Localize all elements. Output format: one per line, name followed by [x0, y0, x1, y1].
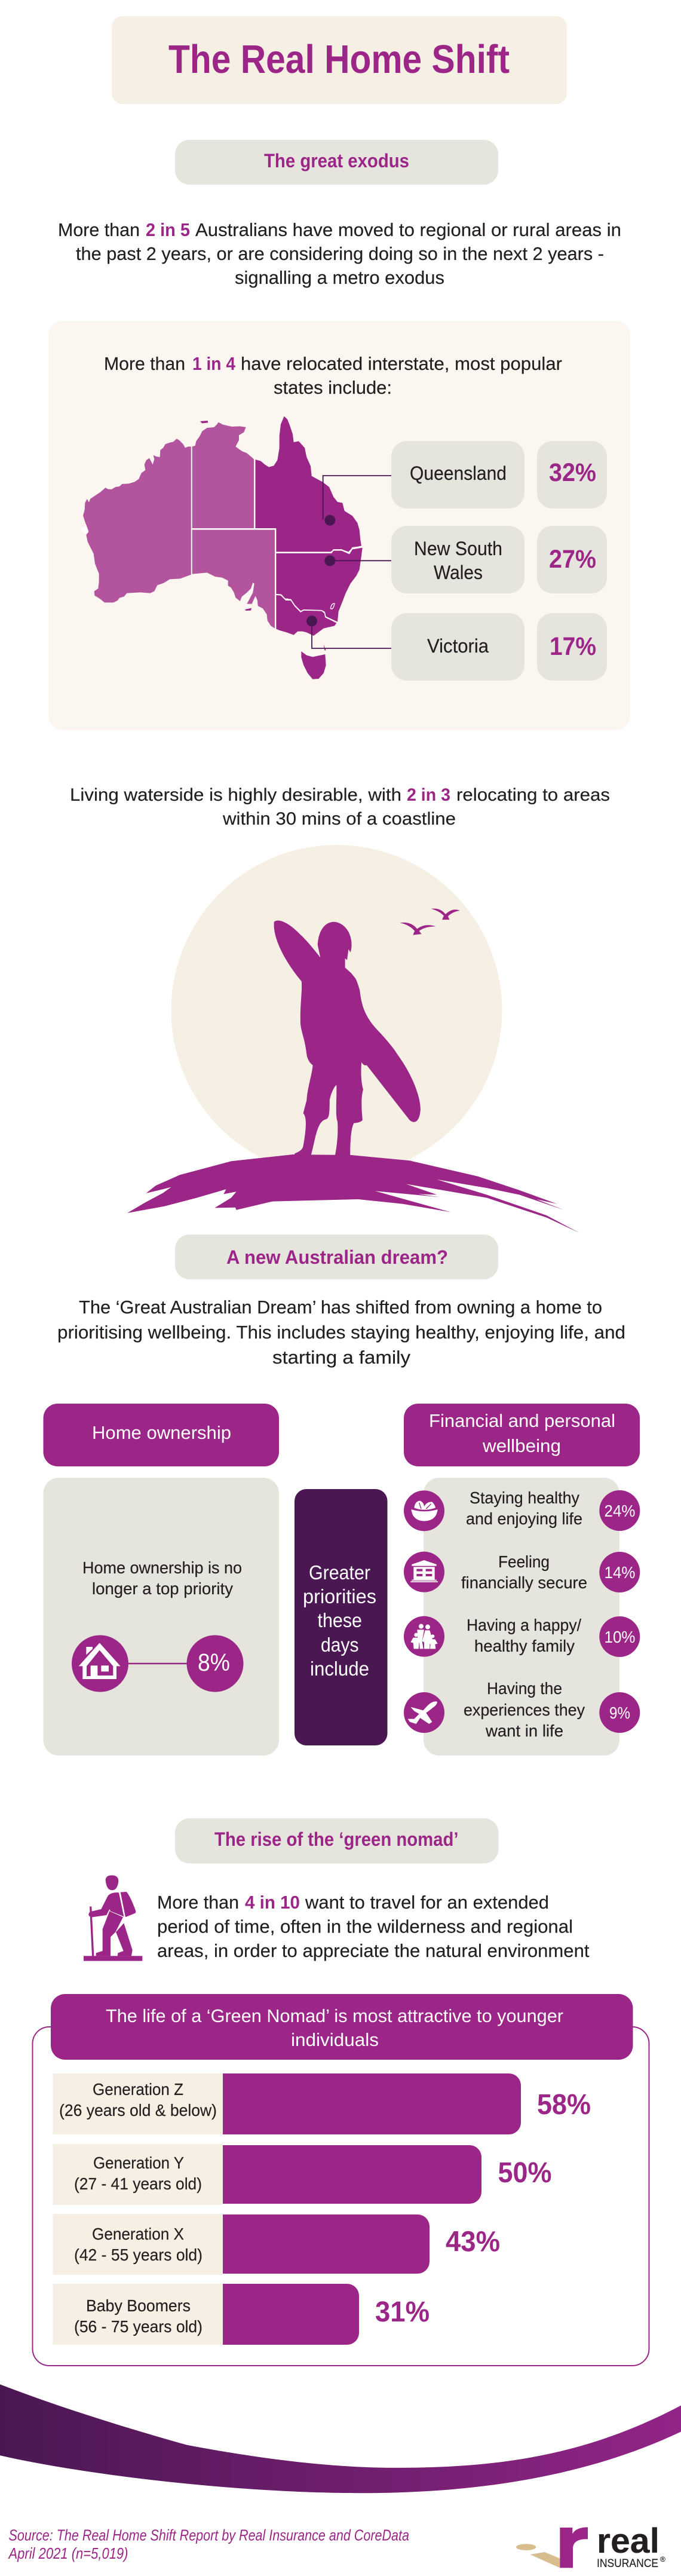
text block: waterside: within 30 mins of a coastline — [222, 809, 456, 829]
logo: Real Insurance: real — [597, 2522, 659, 2560]
text block: metro exodus intro: Australians have moved to regional or rural areas in — [195, 219, 621, 240]
text block: green nomad intro: 4 in 10 — [245, 1892, 300, 1913]
text block: waterside — [70, 785, 610, 829]
title — [112, 16, 567, 104]
row: staying healthy 24%: and enjoying life — [466, 1509, 582, 1528]
panel: greater priorities: Greater — [309, 1561, 370, 1583]
text block: home ownership note: Home ownership is no — [82, 1558, 242, 1577]
source note: Source: The Real Home Shift Report by Real Insurance and CoreData — [8, 2526, 409, 2544]
row: financially secure 14%: 14% — [605, 1563, 636, 1582]
title: The Real Home Shift — [168, 37, 510, 82]
bar: Generation Z 58%: (26 years old & below) — [59, 2101, 217, 2119]
row: staying healthy 24% — [404, 1488, 640, 1531]
text block: home ownership note — [82, 1558, 242, 1598]
logo: Real Insurance: INSURANCE — [597, 2557, 658, 2570]
illustration: surfer at sunset — [127, 845, 579, 1233]
row: Victoria 17%: 17% — [550, 632, 596, 661]
panel: financial and personal wellbeing — [404, 1404, 640, 1756]
text block: interstate heading: states include: — [274, 377, 392, 398]
icon: bird two — [431, 909, 460, 920]
stat: 8% — [186, 1635, 244, 1692]
panel: generations chart — [32, 1994, 649, 2366]
panel: home ownership — [43, 1404, 279, 1756]
heading: green nomad chart title: The life of a ‘Green Nomad’ is most attractive to younger — [106, 2005, 563, 2026]
heading: financial and personal wellbeing: wellbeing — [482, 1435, 561, 1456]
icon: plane — [404, 1692, 444, 1733]
bar: Baby Boomers 31%: (56 - 75 years old) — [74, 2317, 203, 2336]
icon: bank — [404, 1552, 444, 1592]
marker: Queensland — [323, 476, 391, 526]
text block: interstate heading: More than — [104, 353, 185, 374]
text block: green nomad intro: want to travel for an extended — [305, 1892, 549, 1913]
row: financially secure 14% — [404, 1552, 640, 1592]
heading: a new Australian dream — [175, 1235, 498, 1279]
row: happy healthy family 10%: healthy family — [474, 1637, 575, 1655]
source note — [8, 2526, 409, 2562]
heading: a new Australian dream: A new Australian dream? — [226, 1246, 448, 1268]
text block: metro exodus intro — [58, 219, 621, 288]
heading: the rise of the green nomad — [175, 1818, 498, 1863]
panel: interstate relocation — [48, 321, 630, 730]
panel: greater priorities: days — [321, 1634, 358, 1656]
row: New South Wales 27%: New South — [414, 538, 502, 559]
row: New South Wales 27%: Wales — [434, 562, 483, 583]
icon: surfer with board — [274, 920, 421, 1157]
ground brush stroke — [127, 1154, 579, 1233]
bar: Generation Y 50%: (27 - 41 years old) — [74, 2174, 202, 2193]
row: happy healthy family 10% — [404, 1616, 640, 1657]
text block: metro exodus intro: signalling a metro exodus — [235, 267, 444, 288]
bar: Baby Boomers 31%: Baby Boomers — [86, 2296, 191, 2315]
row: financially secure 14%: financially secure — [461, 1573, 587, 1592]
icon: bird one — [400, 923, 436, 935]
marker: Victoria — [306, 615, 391, 648]
row: happy healthy family 10%: Having a happy/ — [467, 1616, 581, 1634]
text block: green nomad intro — [157, 1892, 590, 1961]
text block: interstate heading: have relocated interstate, most popular — [241, 353, 562, 374]
panel: greater priorities: include — [310, 1658, 369, 1680]
text block: interstate heading: 1 in 4 — [192, 353, 236, 374]
heading: the great exodus — [175, 140, 498, 185]
icon: hiker — [84, 1875, 142, 1961]
row: staying healthy 24%: Staying healthy — [470, 1488, 579, 1507]
row: happy healthy family 10%: 10% — [605, 1628, 636, 1646]
logo: Real Insurance — [516, 2522, 665, 2570]
bar: Baby Boomers 31% — [53, 2284, 430, 2345]
bar: Generation Y 50%: Generation Y — [93, 2154, 184, 2172]
heading: financial and personal wellbeing — [404, 1404, 640, 1466]
text block: metro exodus intro: More than — [58, 219, 140, 240]
bar: Generation X 43%: 43% — [446, 2226, 500, 2258]
text block: great Australian dream — [57, 1297, 625, 1368]
logo: Real Insurance: ® — [660, 2555, 665, 2563]
row: experiences 9% — [404, 1679, 640, 1740]
panel: greater priorities: priorities — [303, 1585, 376, 1607]
row: Queensland 32% — [391, 441, 607, 509]
text block: interstate heading — [104, 353, 562, 398]
bar: Generation Y 50%: 50% — [498, 2157, 552, 2189]
heading: the rise of the green nomad: The rise of the ‘green nomad’ — [214, 1828, 459, 1850]
text block: home ownership note: longer a top priority — [92, 1579, 233, 1598]
icon: family — [404, 1616, 444, 1657]
footer swoosh — [0, 2384, 681, 2493]
source note: April 2021 (n=5,019) — [8, 2544, 128, 2562]
row: Queensland 32%: 32% — [549, 458, 596, 487]
text block: great Australian dream: starting a family — [272, 1347, 411, 1368]
heading: green nomad chart title: individuals — [291, 2029, 379, 2050]
row: experiences 9%: experiences they — [464, 1701, 585, 1719]
row: financially secure 14%: Feeling — [498, 1552, 550, 1571]
map: Australia states — [81, 416, 391, 679]
heading: home ownership — [43, 1404, 279, 1466]
row: experiences 9%: 9% — [609, 1704, 630, 1722]
text block: waterside: Living waterside is highly desirable, with — [70, 785, 401, 805]
row: experiences 9%: Having the — [487, 1679, 562, 1698]
bar: Generation Z 58%: 58% — [537, 2089, 591, 2121]
bar: Generation X 43%: (42 - 55 years old) — [74, 2246, 203, 2264]
panel: greater priorities — [295, 1489, 387, 1745]
row: Victoria 17%: Victoria — [427, 635, 489, 657]
bar: Generation X 43%: Generation X — [92, 2225, 184, 2243]
text block: green nomad intro: period of time, often in the wilderness and regional — [157, 1916, 573, 1937]
text block: great Australian dream: prioritising wellbeing. This includes staying healthy, enjoying life, and — [57, 1322, 625, 1343]
text block: waterside: 2 in 3 — [407, 785, 450, 805]
row: staying healthy 24%: 24% — [605, 1502, 636, 1520]
panel: greater priorities: these — [318, 1609, 362, 1631]
text block: metro exodus intro: 2 in 5 — [146, 219, 190, 240]
row: Queensland 32%: Queensland — [410, 462, 507, 484]
text block: green nomad intro: More than — [157, 1892, 239, 1913]
text block: green nomad intro: areas, in order to appreciate the natural environment — [157, 1940, 590, 1961]
bar: Baby Boomers 31%: 31% — [375, 2296, 430, 2328]
bar: Generation Z 58%: Generation Z — [93, 2080, 183, 2099]
icon: house — [72, 1635, 128, 1692]
row: New South Wales 27%: 27% — [549, 545, 596, 574]
bar: Generation Z 58% — [53, 2073, 591, 2134]
text block: waterside: relocating to areas — [456, 785, 610, 805]
bar: Generation X 43% — [53, 2214, 500, 2275]
marker: New South Wales — [324, 555, 391, 566]
row: New South Wales 27% — [391, 526, 607, 593]
text block: metro exodus intro: the past 2 years, or are considering doing so in the next 2 years - — [76, 243, 604, 264]
stat: 8%: 8% — [198, 1649, 230, 1676]
heading: financial and personal wellbeing: Financial and personal — [429, 1410, 615, 1431]
row: experiences 9%: want in life — [485, 1722, 563, 1740]
heading: the great exodus: The great exodus — [264, 150, 409, 171]
icon: salad bowl — [404, 1490, 444, 1531]
bar: Generation Y 50% — [53, 2144, 552, 2205]
row: Victoria 17% — [391, 613, 607, 681]
heading: green nomad chart title — [51, 1994, 633, 2060]
heading: home ownership: Home ownership — [92, 1422, 231, 1443]
text block: great Australian dream: The ‘Great Australian Dream’ has shifted from owning a home to — [79, 1297, 602, 1318]
